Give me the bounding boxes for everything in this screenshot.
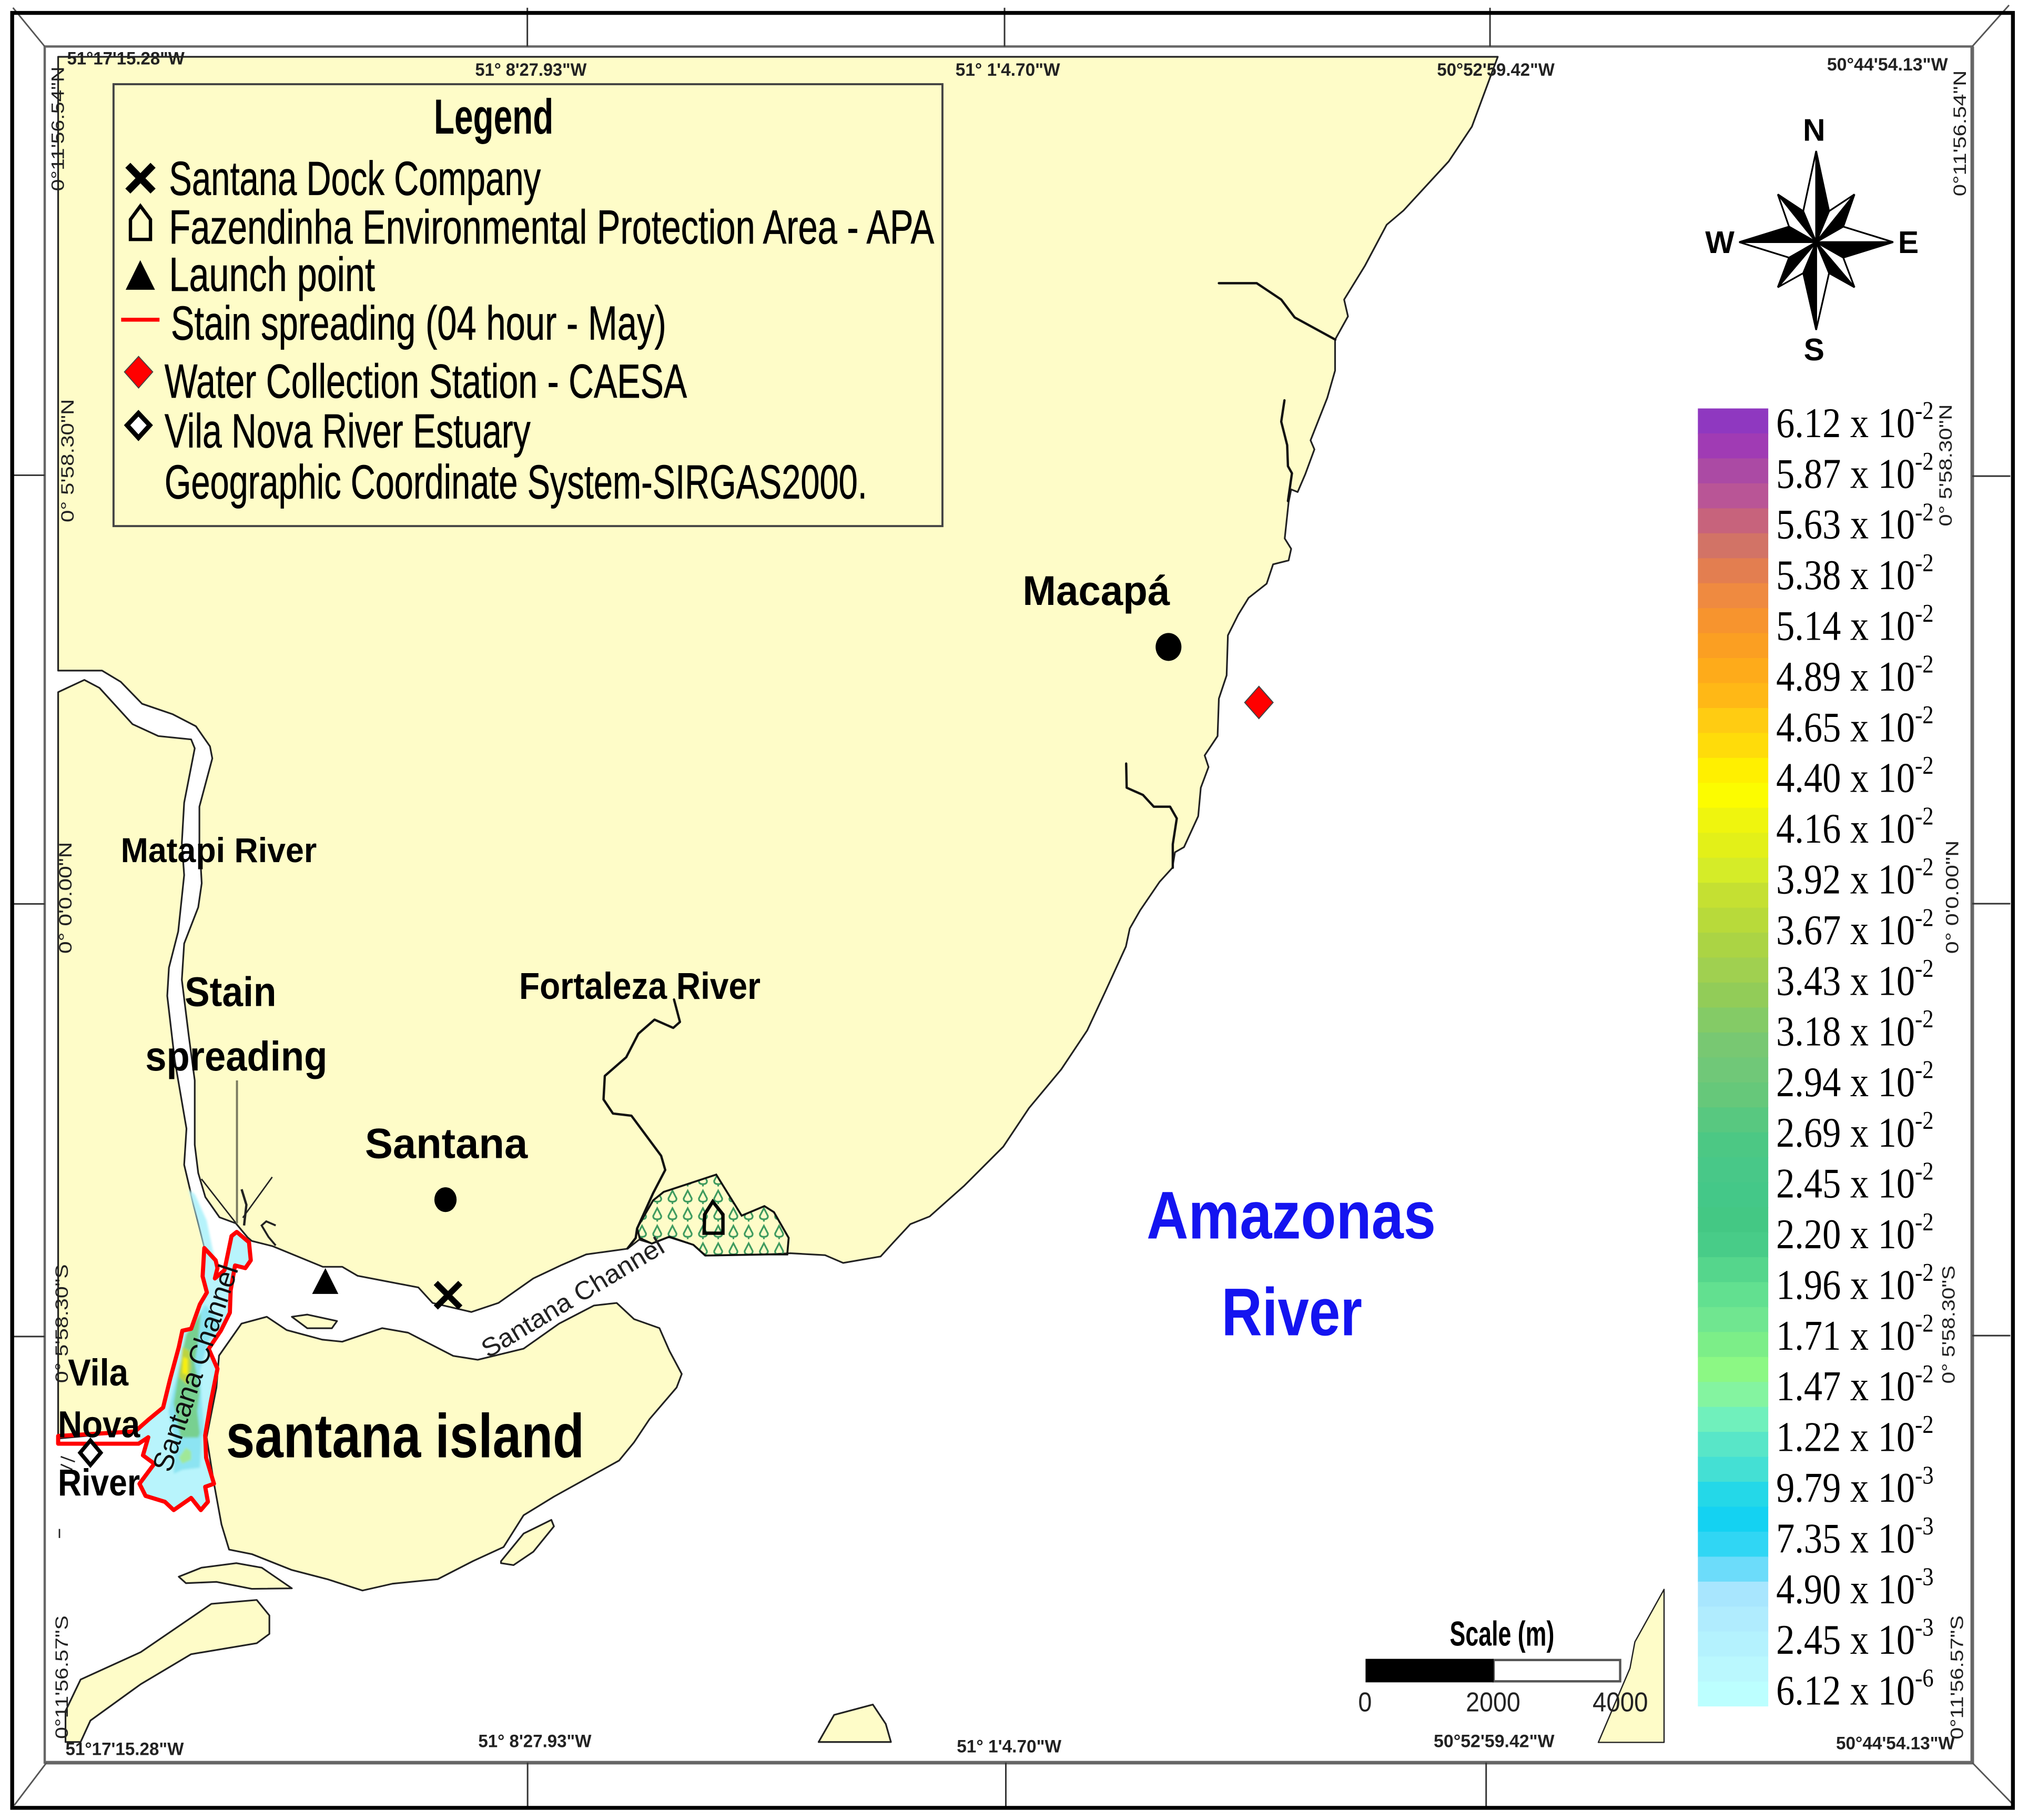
scale bar: 4000	[1593, 1687, 1648, 1717]
colour scale labels: -2	[1915, 802, 1934, 831]
compass rose: S	[1804, 333, 1824, 367]
stain outline	[58, 1232, 251, 1510]
colour scale labels: 6.12 x 10	[1776, 1667, 1936, 1714]
legend title: Legend	[434, 89, 553, 144]
colour scale labels: -2	[1915, 599, 1934, 628]
place label: santana island: santana island	[226, 1401, 584, 1470]
place label: Fortaleza River: Fortaleza River	[519, 966, 760, 1007]
colour scale labels: -2	[1915, 497, 1934, 526]
marker: Macapa city	[1155, 633, 1181, 661]
right coordinate labels: 0° 5'58.30"S	[1939, 1266, 1959, 1383]
top coordinate labels: 50°52'59.42"W	[1437, 60, 1555, 80]
channel label: vertical: Santana Channel	[147, 1261, 245, 1475]
legend item: estuary: Vila Nova River Estuary	[165, 405, 531, 458]
legend note: coordinate system: Geographic Coordinate System-SIRGAS2000.	[165, 456, 867, 509]
place label: Stain spreading	[145, 968, 327, 1079]
left coordinate labels: 0° 0'0.00"N	[56, 842, 76, 954]
icon: red diamond	[124, 357, 153, 388]
left coordinate labels	[48, 66, 78, 1739]
colour scale labels: 1.22 x 10	[1776, 1413, 1936, 1461]
icon: protected area marker	[704, 1201, 723, 1233]
colour scale labels: -3	[1915, 1562, 1934, 1591]
colour scale labels: -2	[1915, 751, 1934, 780]
colour scale labels: -2	[1915, 1106, 1934, 1135]
colour scale labels: -2	[1915, 447, 1934, 476]
colour scale labels: -2	[1915, 1410, 1934, 1439]
colour scale labels: -3	[1915, 1511, 1934, 1540]
colour scale labels: 6.12 x 10	[1776, 399, 1936, 447]
marker: Vila Nova estuary	[80, 1440, 101, 1465]
colour scale labels: 2.45 x 10	[1776, 1160, 1936, 1207]
place label: Vila Nova River: Nova	[58, 1404, 140, 1445]
place label: Matapi River: Matapi River	[121, 831, 317, 870]
scale bar	[1358, 1615, 1648, 1717]
scale title: Scale (m)	[1449, 1615, 1554, 1654]
scale bar: 0	[1358, 1687, 1372, 1717]
bottom coordinate labels: 51° 8'27.93"W	[478, 1732, 592, 1752]
colour scale labels: 3.18 x 10	[1776, 1008, 1936, 1055]
channel label: east: Santana Channel	[476, 1232, 670, 1363]
colour scale labels: -2	[1915, 1207, 1934, 1236]
legend item: stain spreading: Stain spreading (04 hour - May)	[171, 297, 666, 350]
icon: launch triangle	[126, 260, 155, 290]
colour scale labels: -2	[1915, 1359, 1934, 1388]
colour scale labels: -2	[1915, 1004, 1934, 1033]
colour scale labels: 5.63 x 10	[1776, 501, 1936, 548]
colour scale labels: -2	[1915, 1309, 1934, 1338]
colour scale labels: -2	[1915, 548, 1934, 577]
legend item: launch point: Launch point	[169, 248, 375, 301]
legend box	[114, 84, 942, 526]
river lines near Macapa	[1126, 283, 1335, 868]
top coordinate labels: 51° 1'4.70"W	[956, 60, 1060, 80]
icon: protection area	[130, 206, 150, 239]
left coordinate labels: 0° 5'58.30"S	[52, 1264, 72, 1383]
left coordinate labels: 0°11'56.54"N	[48, 66, 68, 191]
colour scale labels: 9.79 x 10	[1776, 1464, 1936, 1511]
colour scale labels: -2	[1915, 1156, 1934, 1185]
right coordinate labels	[1936, 70, 1970, 1740]
place label: Macapa: Macapá	[1022, 568, 1170, 614]
right coordinate labels: 0° 0'0.00"N	[1942, 841, 1962, 954]
marker: launch point	[312, 1268, 338, 1294]
icon: hollow diamond	[127, 413, 150, 438]
top coordinate labels: 51° 8'27.93"W	[475, 60, 587, 80]
colour scale labels: 5.87 x 10	[1776, 450, 1936, 497]
right coordinate labels: 0° 5'58.30"N	[1936, 404, 1956, 527]
colour scale labels: 2.45 x 10	[1776, 1616, 1936, 1663]
scale bar: 2000	[1466, 1687, 1520, 1717]
bottom coordinate labels: 50°44'54.13"W	[1836, 1733, 1955, 1753]
colour scale labels: 2.94 x 10	[1776, 1058, 1936, 1106]
icon: dock cross	[128, 165, 153, 191]
compass rose	[1705, 114, 1919, 367]
right coordinate labels: 0°11'56.54"N	[1950, 70, 1970, 196]
top coordinate labels: 51°17'15.28"W	[67, 49, 185, 69]
santana island	[207, 1303, 682, 1591]
colour scale labels: 3.43 x 10	[1776, 957, 1936, 1004]
colour scale labels: -2	[1915, 903, 1934, 932]
colour scale labels: 5.14 x 10	[1776, 602, 1936, 649]
left coordinate labels: 0°11'56.57"S	[52, 1615, 72, 1739]
label: Amazonas River: Amazonas	[1147, 1178, 1436, 1253]
colour scale labels: 5.38 x 10	[1776, 551, 1936, 599]
place label: Vila Nova River	[58, 1352, 140, 1504]
colour scale labels: 4.40 x 10	[1776, 754, 1936, 802]
colour scale labels: -6	[1915, 1663, 1934, 1692]
marker: water collection station	[1245, 686, 1273, 719]
legend item: water station: Water Collection Station - CAESA	[165, 355, 687, 408]
mouth creeks and leader line	[59, 1080, 276, 1538]
Fortaleza river line	[604, 999, 680, 1248]
colour scale bar	[1698, 408, 1768, 1706]
Fazendinha protection area	[637, 1175, 789, 1256]
colour scale labels: 3.67 x 10	[1776, 906, 1936, 954]
colour scale labels: -2	[1915, 1055, 1934, 1084]
colour scale labels: 2.20 x 10	[1776, 1210, 1936, 1258]
label: Amazonas River	[1147, 1178, 1436, 1350]
colour scale labels: 3.92 x 10	[1776, 855, 1936, 903]
bottom coordinate labels: 51° 1'4.70"W	[957, 1736, 1062, 1756]
mainland with coast	[58, 57, 1498, 1312]
colour scale labels: -2	[1915, 396, 1934, 425]
colour scale labels: 4.90 x 10	[1776, 1565, 1936, 1613]
marker: Santana dock	[436, 1283, 460, 1308]
colour scale labels: -2	[1915, 650, 1934, 679]
top coordinate labels	[67, 49, 1948, 80]
colour scale labels: -2	[1915, 700, 1934, 729]
bottom coordinate labels	[66, 1732, 1955, 1759]
colour scale labels: 2.69 x 10	[1776, 1109, 1936, 1156]
label: Amazonas River: River	[1221, 1275, 1362, 1350]
colour scale labels: 1.71 x 10	[1776, 1312, 1936, 1359]
colour scale labels: 1.47 x 10	[1776, 1362, 1936, 1410]
colour scale labels: -2	[1915, 954, 1934, 983]
colour scale labels: -3	[1915, 1613, 1934, 1642]
colour scale labels: -2	[1915, 852, 1934, 881]
west bank land	[58, 680, 207, 1439]
colour scale labels: 4.65 x 10	[1776, 703, 1936, 751]
place label: Santana: Santana	[365, 1120, 528, 1168]
left coordinate labels: 0° 5'58.30"N	[58, 399, 78, 522]
stain spreading plume	[58, 1189, 251, 1510]
colour scale labels: -3	[1915, 1461, 1934, 1490]
colour scale labels: 1.96 x 10	[1776, 1261, 1936, 1308]
bottom coordinate labels: 50°52'59.42"W	[1434, 1732, 1555, 1752]
legend item: dock: Santana Dock Company	[169, 153, 541, 206]
small islands	[66, 1315, 1664, 1742]
colour scale labels: 7.35 x 10	[1776, 1514, 1936, 1562]
bottom coordinate labels: 51°17'15.28"W	[66, 1739, 184, 1759]
icon: stain line	[121, 319, 159, 320]
colour scale labels	[1776, 396, 1934, 1714]
compass rose: W	[1705, 226, 1735, 260]
compass rose: N	[1803, 114, 1826, 148]
colour scale labels: 4.89 x 10	[1776, 653, 1936, 700]
place label: Stain spreading: Stain	[185, 968, 276, 1015]
top coordinate labels: 50°44'54.13"W	[1827, 55, 1948, 75]
marker: Santana city	[434, 1187, 457, 1212]
place label: Stain spreading: spreading	[145, 1033, 327, 1079]
colour scale labels: 4.16 x 10	[1776, 805, 1936, 852]
right coordinate labels: 0°11'56.57"S	[1948, 1615, 1968, 1740]
colour scale labels: -2	[1915, 1258, 1934, 1287]
place label: Vila Nova River: River	[58, 1462, 140, 1504]
place label: Vila Nova River: Vila	[68, 1352, 129, 1394]
compass rose: E	[1898, 226, 1919, 260]
legend item: protection area: Fazendinha Environmental Protection Area - APA	[169, 201, 935, 254]
